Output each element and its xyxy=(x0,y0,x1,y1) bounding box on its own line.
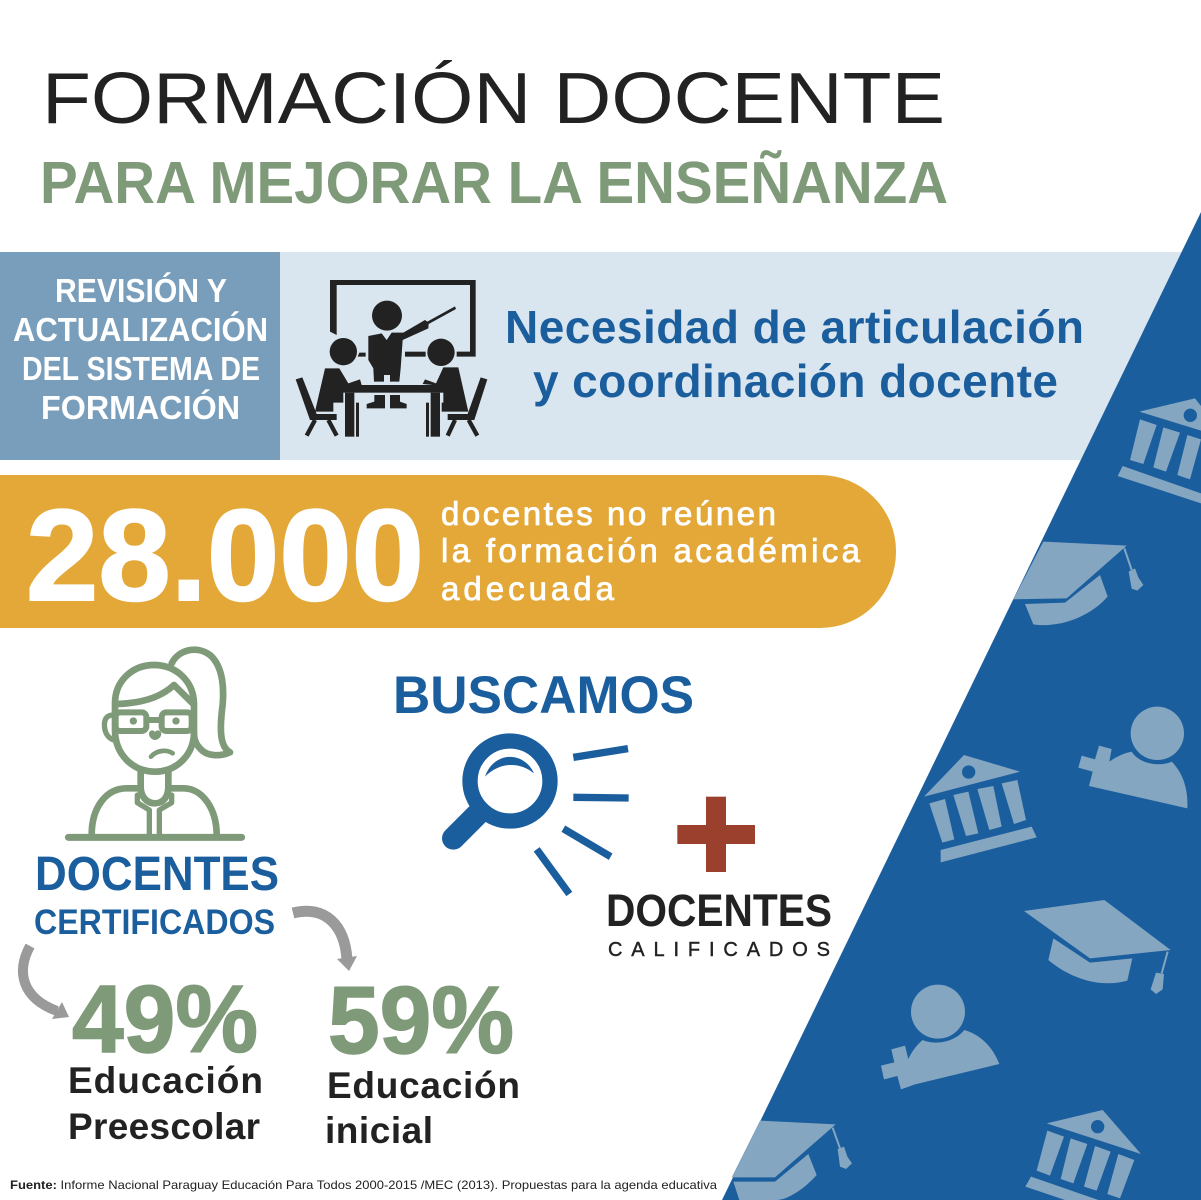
stat: 49% educación preescolar: Preescolar xyxy=(68,1106,260,1147)
heading: necesidad de articulación: y coordinación docente xyxy=(533,355,1058,407)
heading: docentes certificados xyxy=(34,848,279,942)
stat: 49% educación preescolar: 49% xyxy=(72,966,258,1073)
heading: necesidad de articulación xyxy=(505,301,1084,407)
heading: docentes certificados: DOCENTES xyxy=(35,848,279,901)
panel: revisión y actualización: REVISIÓN Y xyxy=(55,272,227,309)
heading: docentes calificados: DOCENTES xyxy=(606,885,832,936)
panel: revisión y actualización: FORMACIÓN xyxy=(41,389,240,426)
stat: 59% educación inicial xyxy=(325,967,520,1151)
panel: blue diagonal background xyxy=(722,212,1201,1200)
icon: person with plus lower xyxy=(881,985,999,1089)
stat: 49% educación preescolar: Educación xyxy=(68,1060,263,1101)
icon: building middle xyxy=(924,755,1037,862)
icon: building top right xyxy=(1118,398,1201,503)
title: FORMACIÓN DOCENTE xyxy=(42,59,945,139)
panel: necesidad de articulación band xyxy=(280,252,1201,460)
stat: 59% educación inicial: inicial xyxy=(325,1110,433,1151)
heading: docentes certificados: CERTIFICADOS xyxy=(34,903,275,942)
icon: worried teacher xyxy=(68,650,242,837)
icon: magnifying glass with rays xyxy=(453,741,629,894)
icon: plus sign xyxy=(677,797,755,872)
panel: 28.000 docentes banner: la formación académica xyxy=(441,532,861,569)
panel: revisión y actualización xyxy=(0,252,280,460)
icon: graduation cap bottom xyxy=(732,1121,852,1200)
heading: buscamos: BUSCAMOS xyxy=(393,666,694,725)
icon: building bottom xyxy=(1025,1110,1141,1200)
icon: person with plus right xyxy=(1078,707,1187,808)
panel: 28.000 docentes banner: adecuada xyxy=(441,570,615,607)
heading: necesidad de articulación: Necesidad de articulación xyxy=(505,301,1084,353)
stat: 49% educación preescolar xyxy=(68,966,263,1147)
stat: 59% educación inicial: 59% xyxy=(328,967,514,1074)
arrow: to 59% xyxy=(293,911,357,971)
panel: 28.000 docentes banner: 28.000 xyxy=(26,482,424,628)
source note: Fuente: Informe Nacional Paraguay Educación Para Todos 2000-2015 /MEC (2013). Propuestas para la agenda educativa xyxy=(10,1178,717,1192)
heading: docentes calificados: CALIFICADOS xyxy=(608,939,830,961)
icon: graduation cap top xyxy=(1013,542,1143,625)
panel: 28.000 docentes banner xyxy=(0,475,896,628)
panel: 28.000 docentes banner: docentes no reúnen xyxy=(441,495,776,532)
arrow: to 49% xyxy=(23,946,69,1019)
heading: docentes calificados xyxy=(606,885,832,961)
panel: revisión y actualización: ACTUALIZACIÓN xyxy=(13,311,268,348)
panel: revisión y actualización: DEL SISTEMA DE xyxy=(22,350,260,387)
subtitle: PARA MEJORAR LA ENSEÑANZA xyxy=(40,150,948,216)
icon: graduation cap middle xyxy=(1024,900,1171,994)
stat: 59% educación inicial: Educación xyxy=(327,1065,520,1106)
icon: classroom presenter and students xyxy=(296,280,487,437)
